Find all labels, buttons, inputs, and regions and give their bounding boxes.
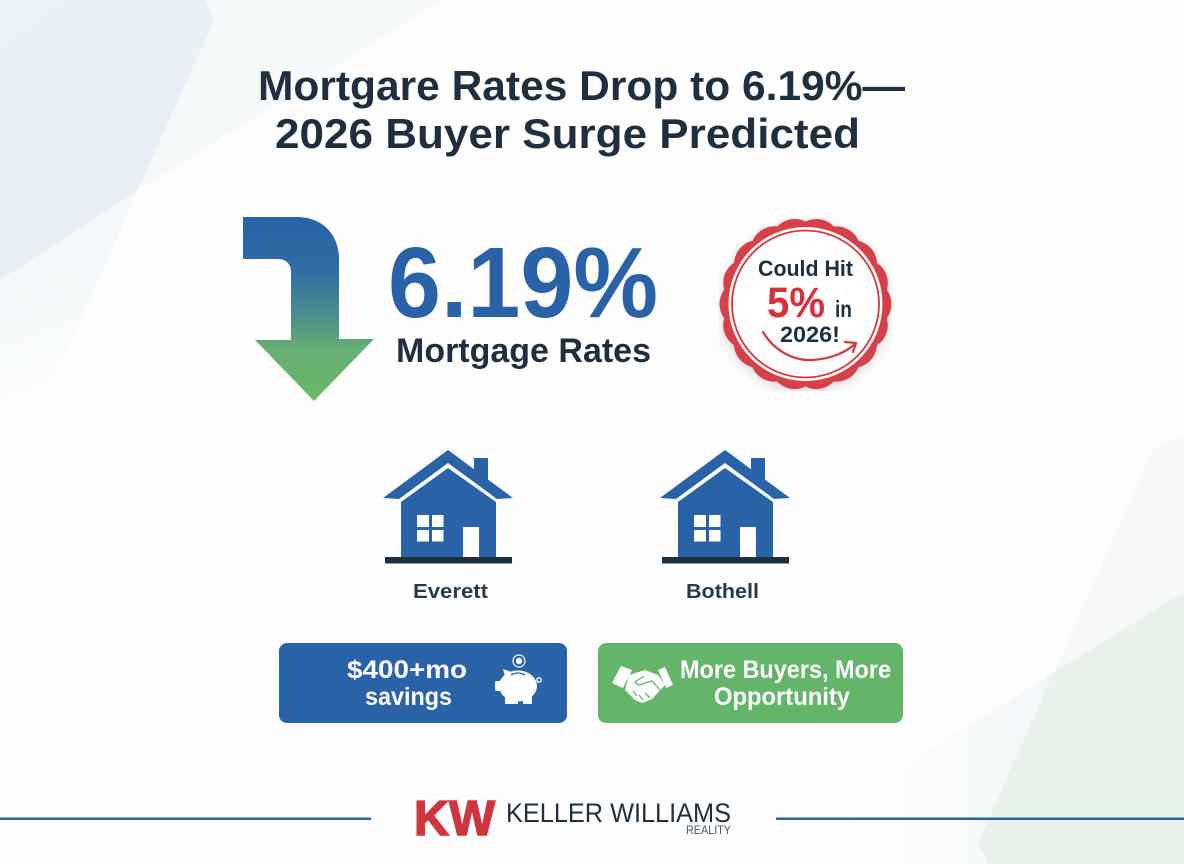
logo: Keller Williams Realty <box>414 792 731 846</box>
footer rule: left <box>0 818 371 820</box>
title: 2026 Buyer Surge Predicted <box>275 110 860 157</box>
footer rule: right <box>776 818 1184 820</box>
label: Bothell: Bothell <box>686 581 759 603</box>
badge: could hit 5% in 2026: 2026! <box>780 322 840 347</box>
logo: Keller Williams Realty: KW <box>414 792 496 846</box>
panel: more buyers <box>598 643 903 723</box>
icon: Bothell house <box>660 450 790 564</box>
icon: down arrow <box>243 217 374 401</box>
panel: savings: $400+mo <box>347 656 467 684</box>
title <box>258 62 905 157</box>
panel: savings: savings <box>365 683 452 711</box>
logo: Keller Williams Realty: KELLER WILLIAMS <box>506 798 731 828</box>
title: Mortgare Rates Drop to 6.19%— <box>258 62 905 109</box>
panel: more buyers: Opportunity <box>714 683 850 711</box>
badge: could hit 5% in 2026: in <box>835 296 852 322</box>
logo: Keller Williams Realty: REALITY <box>686 823 731 837</box>
background shapes: top left <box>0 0 442 445</box>
background shapes: bottom right <box>840 436 1184 864</box>
badge: could hit 5% in 2026: Could Hit <box>758 256 854 281</box>
icon: Everett house <box>383 450 513 564</box>
icon: piggy bank <box>495 655 541 704</box>
badge: could hit 5% in 2026: 5% <box>767 279 825 327</box>
panel: more buyers: More Buyers, More <box>680 656 891 684</box>
icon: handshake <box>612 666 673 703</box>
headline statistic: 6.19% <box>388 227 658 339</box>
badge: could hit 5% in 2026 <box>728 227 882 381</box>
headline statistic: Mortgage Rates <box>396 332 651 370</box>
panel: savings <box>279 643 567 723</box>
label: Everett: Everett <box>413 581 488 603</box>
